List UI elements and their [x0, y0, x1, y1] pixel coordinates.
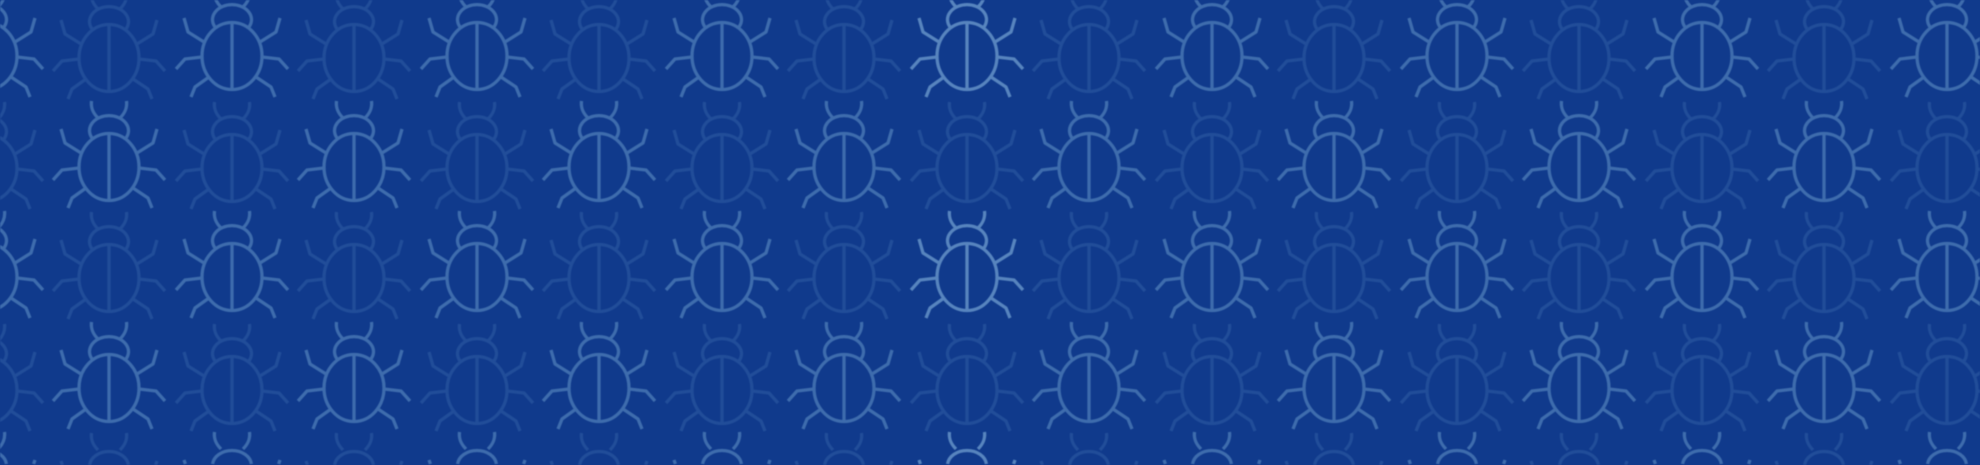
bright bugs, row 3	[0, 210, 1980, 319]
faint bugs, row 2	[0, 102, 1980, 210]
bright bugs, row 1	[0, 0, 1980, 98]
highlighted centre column of bugs	[910, 0, 1024, 465]
faint bugs, row 1	[52, 0, 1881, 100]
bright bugs, row 5	[0, 432, 1968, 465]
bright bugs, row 4	[52, 322, 1882, 430]
faint bugs, row 3	[52, 212, 1881, 320]
faint bugs, row 5	[60, 433, 1874, 465]
bright bugs, row 2	[52, 100, 1882, 209]
faint bugs, row 4	[0, 324, 1980, 432]
